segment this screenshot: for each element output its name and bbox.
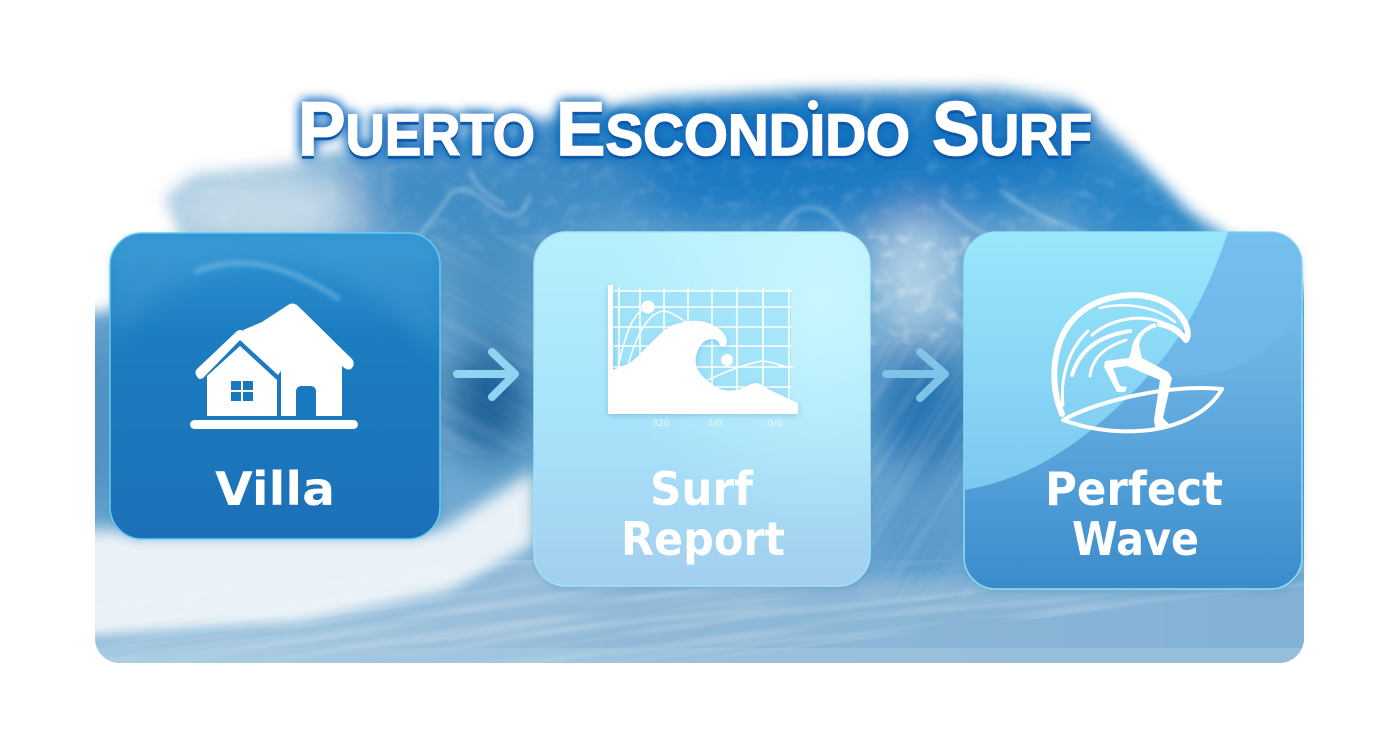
title [298,87,1092,172]
chart: wave report [608,285,798,429]
arrow: surf report to perfect wave [886,352,945,398]
title: SURF [932,87,1092,172]
label: Perfect Wave: Perfect [1045,462,1223,516]
icon: house [190,304,358,429]
label: Perfect Wave [1045,462,1223,566]
wisps of foam [415,170,1090,290]
arrow: villa to surf report [457,352,515,397]
axis labels [652,419,783,429]
panel: wave background [95,78,1304,663]
panel: villa card [110,233,440,539]
label: Surf Report [621,462,785,566]
label: Villa: Villa [215,462,335,516]
axis labels: 320 [652,419,670,429]
axis labels: 1/0 [708,419,723,429]
panel: perfect wave card [964,232,1302,589]
label: Surf Report: Surf [650,462,754,516]
title: PUERTO [298,87,535,172]
label: Surf Report: Report [621,512,785,566]
icon: surfer on wave [1054,295,1222,431]
label: Perfect Wave: Wave [1072,512,1199,566]
title: ESCONDIDO [556,87,910,172]
axis labels: 0/0 [768,419,783,429]
panel: surf report card [534,232,870,586]
